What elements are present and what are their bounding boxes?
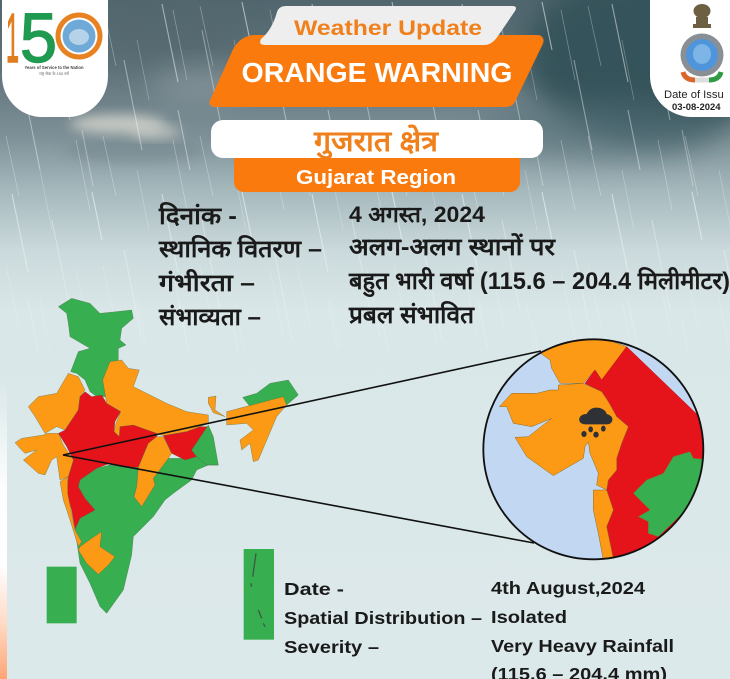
region: Rajasthan top — [540, 340, 627, 384]
text block: English details: Very Heavy Rainfall — [491, 636, 674, 656]
text block: English details — [284, 578, 674, 679]
region: Karnataka — [78, 532, 115, 574]
text block: Hindi details: गंभीरता – — [158, 269, 255, 297]
region: west Rajasthan — [28, 373, 85, 433]
region: red belt — [584, 346, 702, 557]
banner: Hindi region name — [211, 120, 543, 160]
text block: English details: Spatial Distribution – — [284, 608, 482, 628]
region: peninsula green — [75, 457, 218, 613]
icon: rain cloud — [579, 408, 612, 438]
icon: national emblem — [693, 4, 711, 28]
panel: 150 years logo — [2, 0, 108, 117]
logo numeral 5: 5 — [20, 0, 57, 77]
panel: IMD emblem and issue date — [650, 0, 730, 117]
logo tagline: Years of Service to the Nation — [24, 65, 84, 70]
text block: Hindi details — [158, 202, 730, 331]
text block: English details: 4th August,2024 — [491, 578, 645, 598]
panel: 150 years logo: राष्ट्र सेवा के 150 वर्ष — [39, 71, 70, 76]
banner: weather update — [260, 6, 516, 45]
heading: Gujarat region: Gujarat Region — [296, 167, 456, 189]
text block: English details: Date - — [284, 579, 344, 599]
banner: orange warning — [212, 38, 541, 104]
zoom lines — [63, 351, 541, 543]
zoomed Gujarat circle — [483, 335, 713, 563]
region: Arunachal — [243, 380, 298, 407]
region: Jharkhand — [163, 427, 208, 460]
region: green interior — [633, 452, 702, 537]
region: Chhattisgarh and Telangana border — [134, 437, 172, 507]
region: Sikkim corridor — [208, 396, 225, 417]
region: Lakshadweep inset — [47, 567, 77, 623]
region: Konkan — [60, 477, 82, 547]
region: north green — [58, 298, 133, 397]
region: Gujarat — [15, 433, 73, 480]
text block: Hindi details: बहुत भारी वर्षा (115.6 – 204.4 मिलीमीटर) — [348, 267, 730, 298]
logo seal — [56, 12, 102, 60]
panel: 150 years logo: 1 — [6, 0, 19, 77]
text block: Hindi details: दिनांक - — [158, 202, 237, 230]
text block: Hindi details: प्रबल संभावित — [348, 301, 475, 329]
heading: weather update: Weather Update — [294, 16, 482, 40]
date of issue: Date of Issu — [664, 89, 724, 101]
text block: Hindi details: 4 अगस्त, 2024 — [349, 202, 486, 227]
heading: orange warning: ORANGE WARNING — [242, 57, 512, 88]
text block: Hindi details: अलग-अलग स्थानों पर — [349, 233, 556, 261]
region: Gujarat — [499, 383, 628, 490]
text block: English details: Isolated — [491, 607, 567, 627]
icon: tricolour ribbon — [683, 72, 721, 80]
region: north-east — [227, 397, 287, 462]
region: central red — [58, 392, 157, 529]
issue date value: 03-08-2024 — [672, 102, 721, 113]
icon: IMD seal — [680, 34, 724, 76]
region: Uttarakhand, UP, Bihar — [103, 360, 208, 437]
heading: Hindi region name: गुजरात क्षेत्र — [313, 124, 439, 160]
text block: Hindi details: स्थानिक वितरण – — [158, 235, 322, 263]
map of India — [15, 298, 298, 640]
region: Andaman inset — [244, 549, 274, 640]
region: Konkan — [593, 490, 613, 560]
region: West Bengal — [192, 425, 218, 465]
text block: Hindi details: संभाव्यता – — [158, 304, 261, 331]
banner: Gujarat region — [234, 150, 520, 192]
text block: English details: Severity – — [284, 637, 379, 657]
